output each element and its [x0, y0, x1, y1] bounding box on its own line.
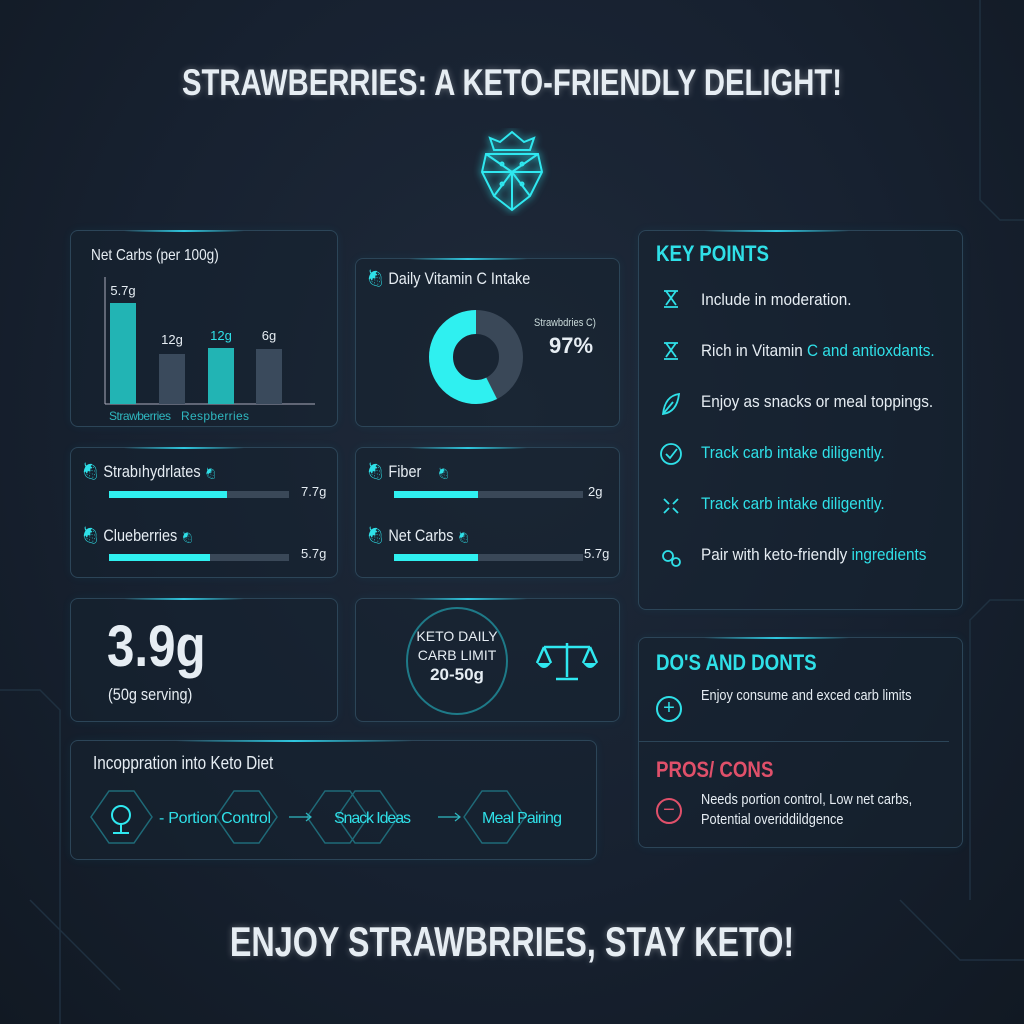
serving text: (50g serving): [108, 685, 192, 704]
callout: 97%: Strawbdries C): [534, 317, 596, 329]
row 1: 🍓︎ Fiber 🍓︎: [366, 462, 449, 481]
donut chart: [429, 310, 523, 404]
icon: geometric strawberry: [476, 128, 548, 216]
flow: hexagons and arrows: - Portion Control: [159, 810, 271, 827]
panel: net carbs bar chart: [70, 230, 338, 427]
bar chart: 6g: [262, 328, 276, 343]
footer slogan: ENJOY STRAWBRRIES, STAY KETO!: [230, 918, 794, 965]
row 2: 🍓︎ Net Carbs 🍓︎: [366, 526, 469, 545]
bar chart: Strawberries: [109, 409, 171, 423]
bar chart: Respberries: [181, 409, 249, 423]
ring with text: 20-50g: [430, 665, 484, 684]
point list: [701, 290, 935, 564]
panel: vitamin C donut: 97%: [549, 333, 593, 358]
heading: Incoppration into Keto Diet: [93, 753, 273, 773]
row 2: 🍓︎ Clueberries 🍓︎: [81, 526, 193, 545]
panel: incorporation into keto diet: [70, 740, 597, 860]
point list: Enjoy as snacks or meal toppings.: [701, 392, 933, 411]
flow: hexagons and arrows: Snack Ideas: [334, 810, 411, 827]
heading: dos and donts: DO'S AND DONTS: [656, 650, 817, 675]
point icons: [660, 290, 682, 567]
icon: minus: −: [663, 799, 675, 821]
point list: Include in moderation.: [701, 290, 852, 309]
ring with text: CARB LIMIT: [418, 647, 496, 663]
panel: 3.9g serving: [70, 598, 338, 722]
row 1: 🍓︎ Strabıhydrlates 🍓︎: [81, 462, 216, 481]
big number: 3.9g: [107, 614, 206, 679]
panel: vitamin C donut: [355, 258, 620, 427]
bar chart: 12g: [210, 328, 232, 343]
point list: Track carb intake diligently.: [701, 494, 885, 513]
bar chart: 5.7g: [110, 283, 136, 298]
ring with text: KETO DAILY: [416, 628, 498, 644]
heading: KEY POINTS: [656, 241, 769, 266]
panel: dos and donts / pros cons: Potential overiddildgence: [701, 811, 843, 828]
panel: fiber progress: 2g: [588, 484, 602, 499]
panel: dos and donts / pros cons: Needs portion control, Low net carbs,: [701, 791, 912, 808]
panel: dos and donts / pros cons: Enjoy consume and exced carb limits: [701, 687, 911, 704]
flow: hexagons and arrows: [90, 790, 562, 844]
title: STRAWBERRIES: A KETO-FRIENDLY DELIGHT!: [182, 62, 842, 103]
panel: keto daily limit: [355, 598, 620, 722]
icon: minus: [656, 798, 682, 824]
heading: Net Carbs (per 100g): [91, 247, 219, 264]
ring with text: [406, 607, 508, 715]
panel: fiber progress: 5.7g: [584, 546, 609, 561]
point list: Track carb intake diligently.: [701, 443, 885, 462]
point list: Pair with keto-friendly ingredients: [701, 545, 926, 564]
panel: carbohydrates progress: 5.7g: [301, 546, 326, 561]
panel: carbohydrates progress: 7.7g: [301, 484, 326, 499]
icon: plus: [656, 696, 682, 722]
bar chart: 12g: [161, 332, 183, 347]
panel: key points: [638, 230, 963, 610]
panel: fiber progress: [355, 447, 620, 578]
flow: hexagons and arrows: Meal Pairing: [482, 810, 562, 827]
heading: pros cons: PROS/ CONS: [656, 757, 773, 782]
point list: Rich in Vitamin C and antioxdants.: [701, 341, 935, 360]
icon: scales: [536, 643, 598, 680]
bar chart: [104, 277, 315, 423]
panel: carbohydrates progress: [70, 447, 338, 578]
panel: dos and donts / pros cons: [638, 637, 963, 848]
icon: plus: +: [663, 697, 675, 719]
heading: 🍓︎ Daily Vitamin C Intake: [366, 269, 530, 288]
